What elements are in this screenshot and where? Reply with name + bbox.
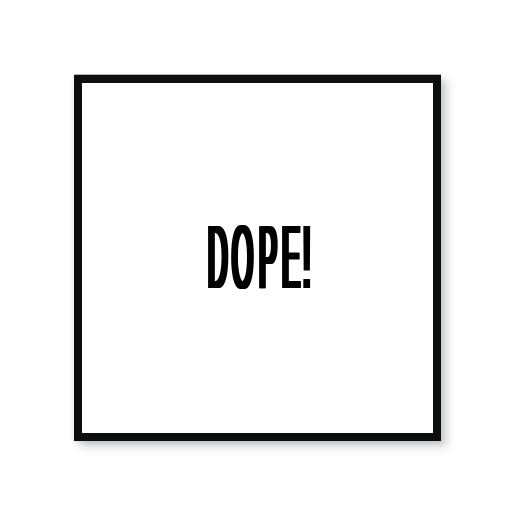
picture frame — [74, 75, 441, 441]
title: DOPE!: D — [208, 208, 228, 308]
title: DOPE!: O — [232, 208, 253, 308]
title: DOPE!: E — [282, 208, 300, 308]
title: DOPE!: P — [259, 208, 277, 308]
title: DOPE! — [208, 208, 311, 308]
title: DOPE!: ! — [303, 208, 311, 308]
